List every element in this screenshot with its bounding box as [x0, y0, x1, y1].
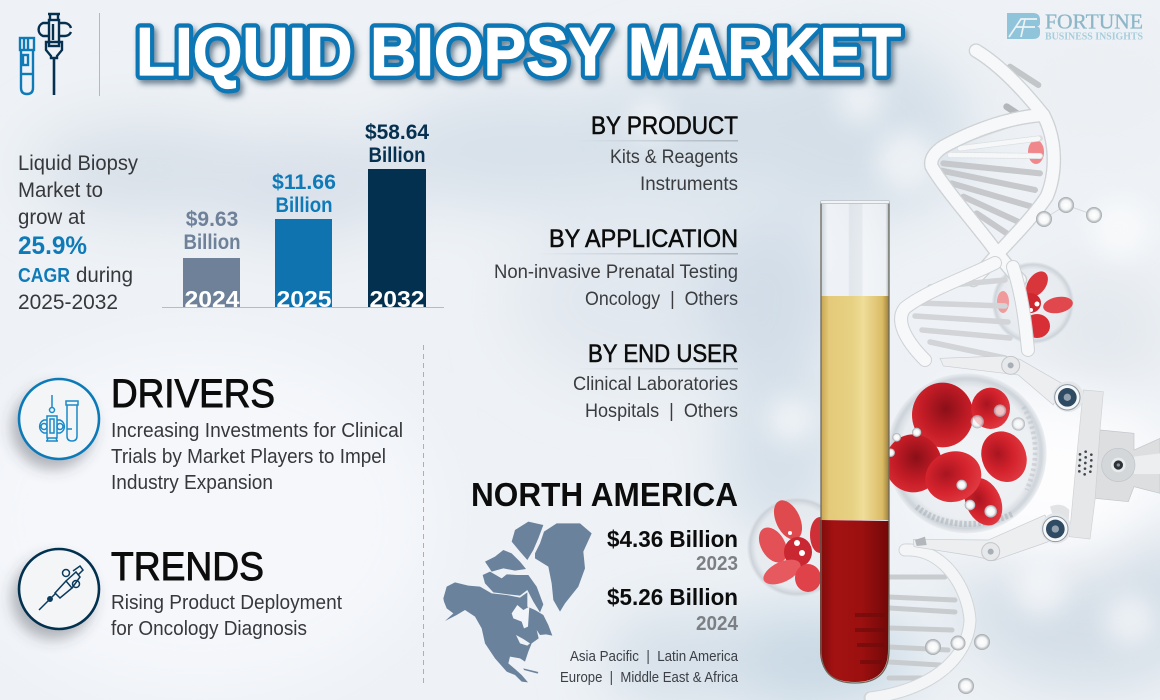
- segment: by end user: BY END USER: [588, 340, 738, 368]
- bar 2025: Billion: [276, 194, 332, 217]
- text: trends description: for Oncology Diagnosis: [111, 618, 307, 640]
- CAGR text block: CAGR: [18, 265, 70, 287]
- header icon: test tube and syringe: [20, 14, 71, 95]
- icon: trends syringe: [19, 549, 99, 629]
- logo: Fortune Business Insights: FORTUNE: [1045, 10, 1143, 34]
- text: drivers description: Trials by Market Players to Impel: [111, 446, 386, 468]
- regional values: $4.36 Billion: [607, 526, 738, 552]
- vertical dashed divider: [422, 345, 424, 686]
- bar 2025: $11.66: [272, 171, 336, 194]
- text: drivers description: Increasing Investments for Clinical: [111, 420, 403, 442]
- other regions: Asia Pacific | Latin America: [570, 649, 739, 665]
- CAGR text block: 2025-2032: [18, 291, 118, 314]
- bar 2032: Billion: [368, 144, 426, 167]
- robotic arm: [913, 356, 1160, 561]
- cell sphere: left small: [747, 496, 847, 597]
- bar 2024: 2024: [184, 286, 240, 312]
- regional values: $5.26 Billion: [607, 584, 738, 610]
- bar 2032: [365, 121, 429, 312]
- icon: drivers syringe and tube: [19, 379, 99, 459]
- logo: Fortune Business Insights: [1007, 10, 1143, 42]
- CAGR text block: grow at: [18, 206, 85, 229]
- heading: drivers: DRIVERS: [111, 372, 275, 416]
- bar 2024: [183, 208, 240, 312]
- segment: by end user: [573, 340, 738, 422]
- text: drivers description: [111, 420, 403, 494]
- bar 2024: Billion: [184, 231, 240, 254]
- segment: by end user: Clinical Laboratories: [573, 373, 738, 395]
- title: LIQUID BIOPSY MARKET: [136, 14, 901, 90]
- segment: by product: BY PRODUCT: [591, 112, 738, 140]
- segment: by application: Oncology | Others: [585, 288, 738, 310]
- header divider: [98, 13, 100, 96]
- DNA helix: lower: [870, 550, 970, 698]
- text: trends description: Rising Product Deployment: [111, 592, 342, 614]
- CAGR text block: Liquid Biopsy: [18, 152, 138, 175]
- logo: Fortune Business Insights: BUSINESS INSIGHTS: [1045, 32, 1143, 42]
- segment: by application: Non-invasive Prenatal Testing: [494, 261, 738, 283]
- panel: drivers: [19, 372, 403, 494]
- DNA helix: middle: [901, 263, 1028, 360]
- regional values: 2024: [696, 613, 739, 635]
- segment: by end user: Hospitals | Others: [585, 400, 738, 422]
- heading: trends: TRENDS: [111, 545, 264, 589]
- text: trends description: [111, 592, 342, 640]
- bar 2024: $9.63: [186, 208, 238, 231]
- other regions: Europe | Middle East & Africa: [560, 670, 739, 686]
- bar 2025: 2025: [276, 286, 332, 312]
- panel: trends: [19, 545, 342, 640]
- title: LIQUID BIOPSY MARKET: [136, 14, 901, 90]
- bar 2032: $58.64: [365, 121, 429, 144]
- CAGR text block: 25.9%: [18, 232, 87, 260]
- regional values: [607, 526, 739, 635]
- segment: by application: BY APPLICATION: [549, 225, 738, 253]
- segment: by application: [494, 225, 738, 310]
- regional values: 2023: [696, 553, 738, 575]
- DNA helix: upper: [931, 51, 1054, 280]
- segment: by product: Instruments: [640, 173, 738, 195]
- test tube with plasma and blood: [820, 200, 890, 683]
- bar 2025: [272, 171, 336, 312]
- bar chart: [183, 121, 429, 312]
- map: North America: [443, 522, 592, 682]
- cell sphere: main red blood cells: [885, 373, 1047, 533]
- CAGR text block: [18, 152, 138, 314]
- regional heading: NORTH AMERICA: [471, 476, 738, 513]
- CAGR text block: Market to: [18, 179, 103, 202]
- CAGR text block: during: [76, 264, 133, 287]
- segment: by product: Kits & Reagents: [610, 146, 738, 168]
- text: drivers description: Industry Expansion: [111, 472, 273, 494]
- segment: by product: [575, 112, 738, 195]
- bar 2032: 2032: [370, 286, 424, 312]
- other regions: [560, 649, 739, 686]
- cell sphere: upper small: [992, 140, 1074, 344]
- molecule beads: [925, 197, 1102, 694]
